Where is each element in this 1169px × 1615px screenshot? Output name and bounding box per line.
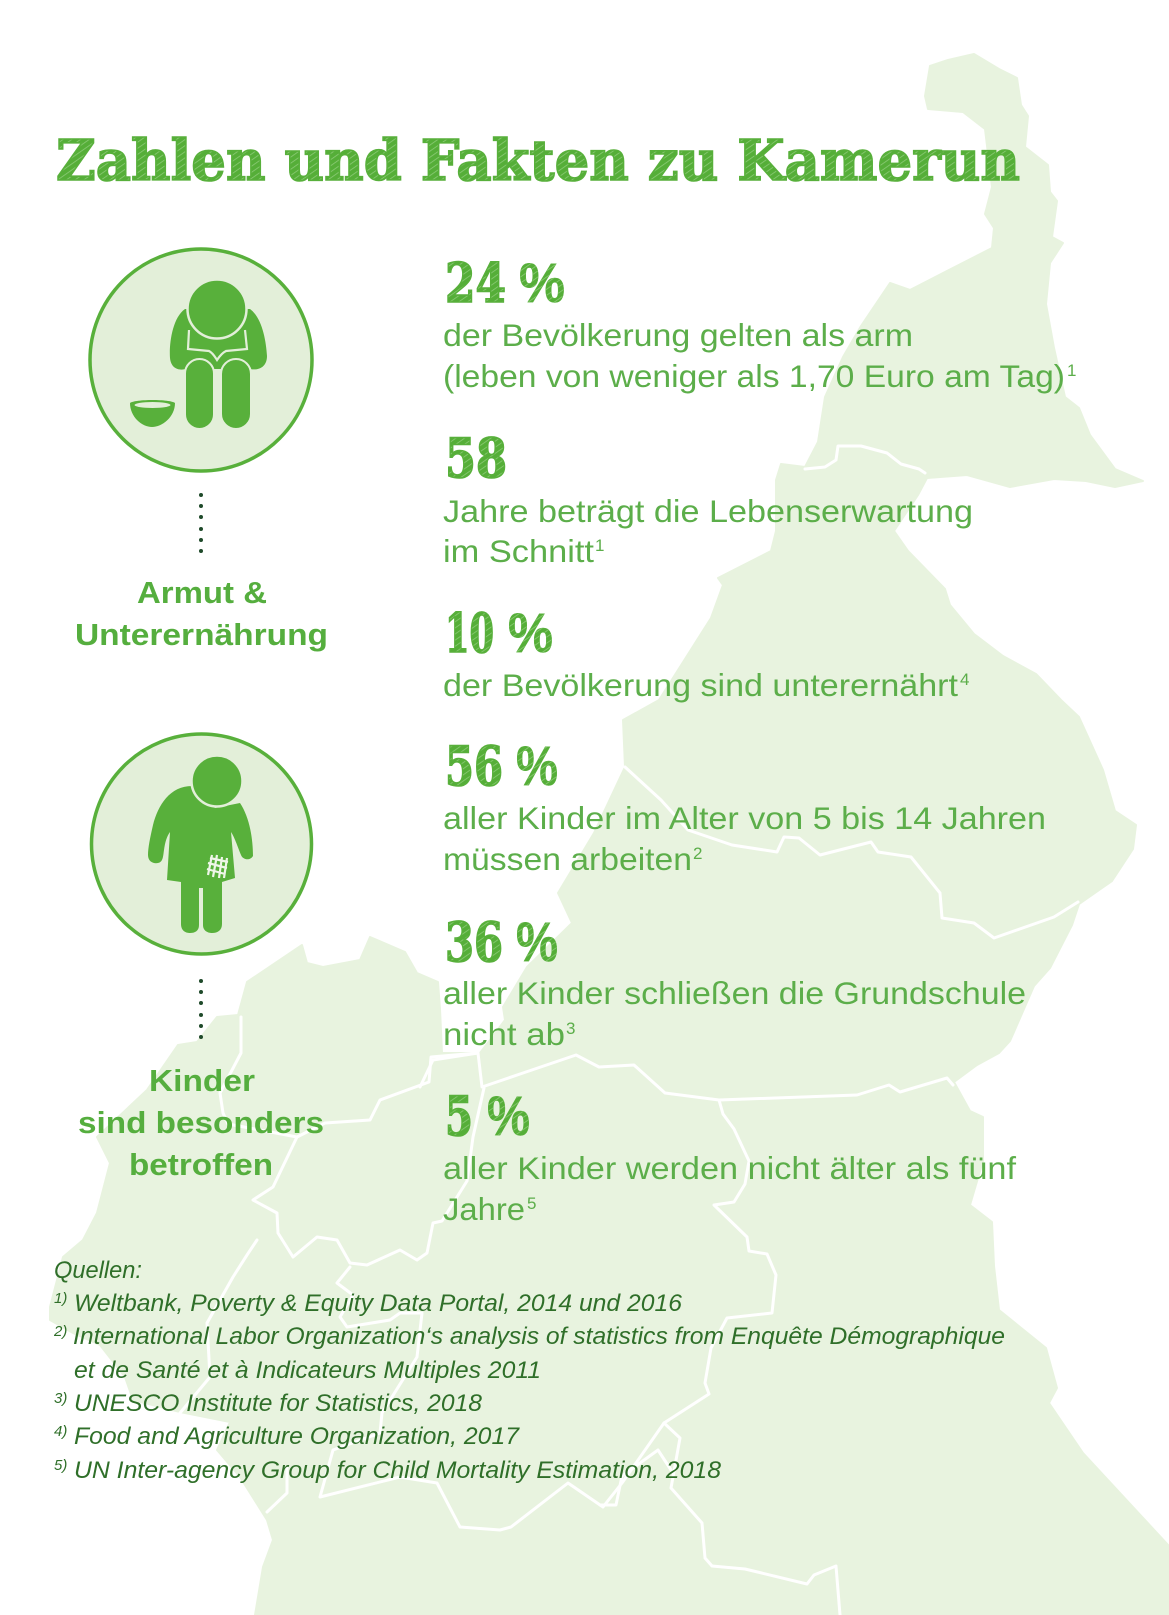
stat: 56 %: 56: [445, 734, 503, 798]
stat: 36 %: [443, 910, 1026, 1052]
stat: 24 %: 24: [445, 251, 506, 315]
sources: UNESCO Institute for Statistics, 2018: [74, 1390, 482, 1417]
title: Zahlen und Fakten zu Kamerun: [56, 128, 1020, 194]
sources: UN Inter-agency Group for Child Mortality Estimation, 2018: [74, 1457, 721, 1484]
sources: Quellen:: [54, 1257, 142, 1284]
label: Kinder sind besonders betroffen: [78, 1063, 324, 1182]
stat: 36 %: 3: [566, 1019, 575, 1038]
stat: 58: [443, 426, 973, 569]
stat: 10 %: der Bevölkerung sind unterernährt: [443, 667, 958, 703]
stat: 24 %: der Bevölkerung gelten als arm: [443, 317, 913, 353]
stat: 58: 58: [445, 426, 507, 490]
sources: Food and Agriculture Organization, 2017: [74, 1423, 520, 1450]
stat: 56 %: [443, 734, 1046, 877]
sources: [53, 1257, 1005, 1484]
label: Kinder sind besonders betroffen: Kinder: [149, 1063, 255, 1098]
stat: 10 %: %: [508, 601, 553, 664]
stat: 10 %: [443, 601, 969, 703]
sources: 1): [54, 1290, 67, 1307]
stat: 24 %: [443, 251, 1076, 394]
stat: 58: im Schnitt: [443, 533, 594, 569]
stat: 36 %: %: [516, 910, 558, 973]
stat: 58: Jahre beträgt die Lebenserwartung: [443, 493, 973, 529]
dotted connector: children: [199, 979, 203, 1039]
sources: et de Santé et à Indicateurs Multiples 2011: [74, 1357, 541, 1384]
sources: Weltbank, Poverty & Equity Data Portal, 2014 und 2016: [74, 1290, 682, 1317]
label: Armut & Unterernährung: [75, 575, 328, 652]
sources: 3): [54, 1390, 67, 1407]
stat: 56 %: %: [516, 734, 558, 797]
stat: 5 %: %: [487, 1084, 530, 1147]
stat: 56 %: 2: [693, 844, 702, 863]
sources: 4): [54, 1423, 67, 1440]
sources: 2): [53, 1323, 67, 1340]
stat: 5 %: [443, 1084, 1016, 1227]
stat: 10 %: 4: [960, 670, 969, 689]
stat: 36 %: aller Kinder schließen die Grundschule: [443, 975, 1026, 1011]
label: Armut & Unterernährung: Armut &: [137, 575, 267, 610]
stat: 5 %: Jahre: [443, 1191, 525, 1227]
stat: 10 %: 10: [445, 601, 494, 665]
icon: child in patched dress: [92, 734, 312, 954]
sources: International Labor Organization‘s analysis of statistics from Enquête Démographique: [73, 1323, 1005, 1350]
stat: 5 %: aller Kinder werden nicht älter als fünf: [443, 1150, 1016, 1186]
stat: 36 %: 36: [445, 910, 503, 974]
stat: 5 %: 5: [445, 1084, 473, 1148]
sources: 5): [54, 1457, 67, 1474]
stat: 56 %: aller Kinder im Alter von 5 bis 14 Jahren: [443, 800, 1046, 836]
stat: 24 %: %: [519, 251, 565, 314]
stat: 5 %: 5: [527, 1194, 536, 1213]
stat: 58: 1: [595, 536, 604, 555]
stat: 36 %: nicht ab: [443, 1016, 565, 1052]
label: Armut & Unterernährung: Unterernährung: [75, 617, 328, 652]
label: Kinder sind besonders betroffen: betroffen: [129, 1147, 273, 1182]
stat: 56 %: müssen arbeiten: [443, 841, 692, 877]
dotted connector: poverty: [199, 493, 203, 553]
icon: poor seated person with bowl: [90, 249, 312, 471]
label: Kinder sind besonders betroffen: sind besonders: [78, 1105, 324, 1140]
stat: 24 %: 1: [1067, 361, 1076, 380]
stat: 24 %: (leben von weniger als 1,70 Euro am Tag): [443, 358, 1065, 394]
